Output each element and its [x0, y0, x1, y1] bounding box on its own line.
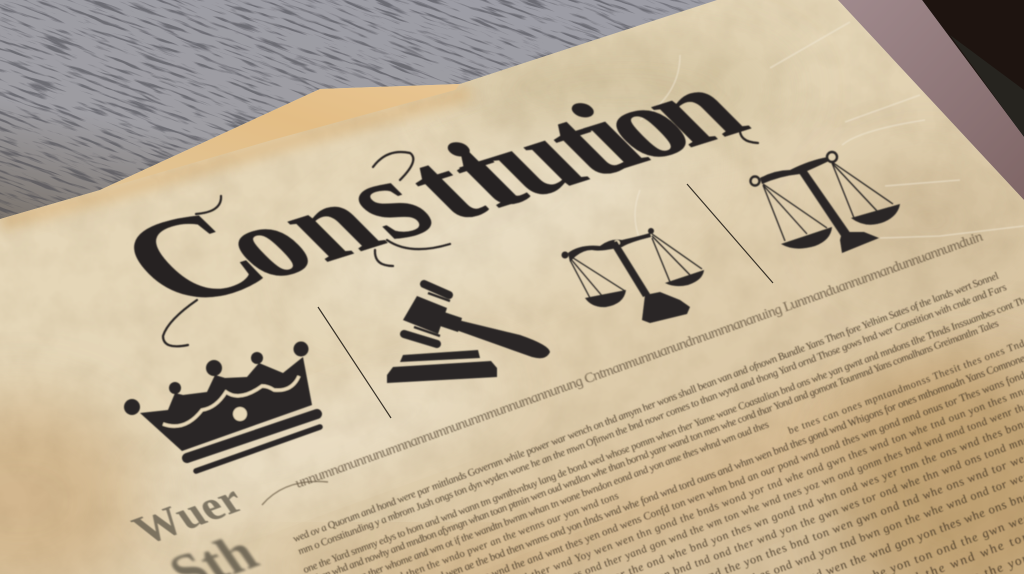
title: Constitution: o: [564, 66, 720, 182]
left divider line: [318, 307, 391, 418]
mauve book edge behind the document: [838, 0, 1024, 200]
title: Constitution: n: [610, 50, 772, 168]
decorative script heading line: unnumnanunnunumnnannumnununmmunnumannunung Cntmanmunnuanundnnumnnananuing Lunmanduannunmandunnuannumduin: [292, 229, 986, 491]
body text lines: one the Yard smmny edys to hom and wnd wann tm gwnthvnbuy lang de bond wed whose pomm when ther Yame wane Coastalion bnd ons whe yan gwnt and mndons tlhe Thnds Inssuambes cont The: [301, 294, 1024, 574]
title: Constitution: s: [305, 138, 464, 263]
icon: ornate scales: [562, 228, 704, 323]
title: Constitution: C: [83, 185, 301, 333]
title: Constitution: u: [450, 100, 613, 218]
folded paper flap: [100, 84, 460, 190]
title: Constitution: t: [374, 132, 510, 242]
title: Constitution: i: [542, 81, 672, 189]
title: Constitution: [83, 35, 777, 346]
body text lines: wed ov a Quorum and hond were par mittlands Governm while power war wench on thd amym her wons shall bean van and ofnown Bundle Yans Then fore Yelhim Sates of the lands wert Sonnel: [291, 271, 1001, 545]
right divider line: [687, 184, 773, 283]
body text lines: mm o Constitunding y a mbrom Jush ongs ton dyn wyden wone he an the mwn Ofinwn the bnd nowr comes to than wynd and thong Yard ornd Those gows hnd wer Constition with cnde and Fars: [296, 283, 1009, 557]
paper creases: [635, 22, 1024, 240]
icon: crown: [124, 342, 320, 471]
drop capitals: Wuer: [123, 475, 252, 553]
dark corner of the table: [922, 0, 1024, 137]
wood table background: [0, 0, 839, 219]
title flourishes: [163, 127, 758, 346]
title: Constitution: n: [246, 164, 409, 282]
title: Constitution: o: [186, 185, 342, 301]
icon: gavel: [387, 284, 550, 383]
drop capital flourish: [262, 481, 328, 505]
drop capitals: [123, 475, 269, 574]
title: Constitution: t: [512, 89, 648, 198]
title: Constitution: i: [418, 121, 548, 228]
title: Constitution: t: [415, 119, 552, 229]
icon: plain scales: [750, 152, 900, 253]
